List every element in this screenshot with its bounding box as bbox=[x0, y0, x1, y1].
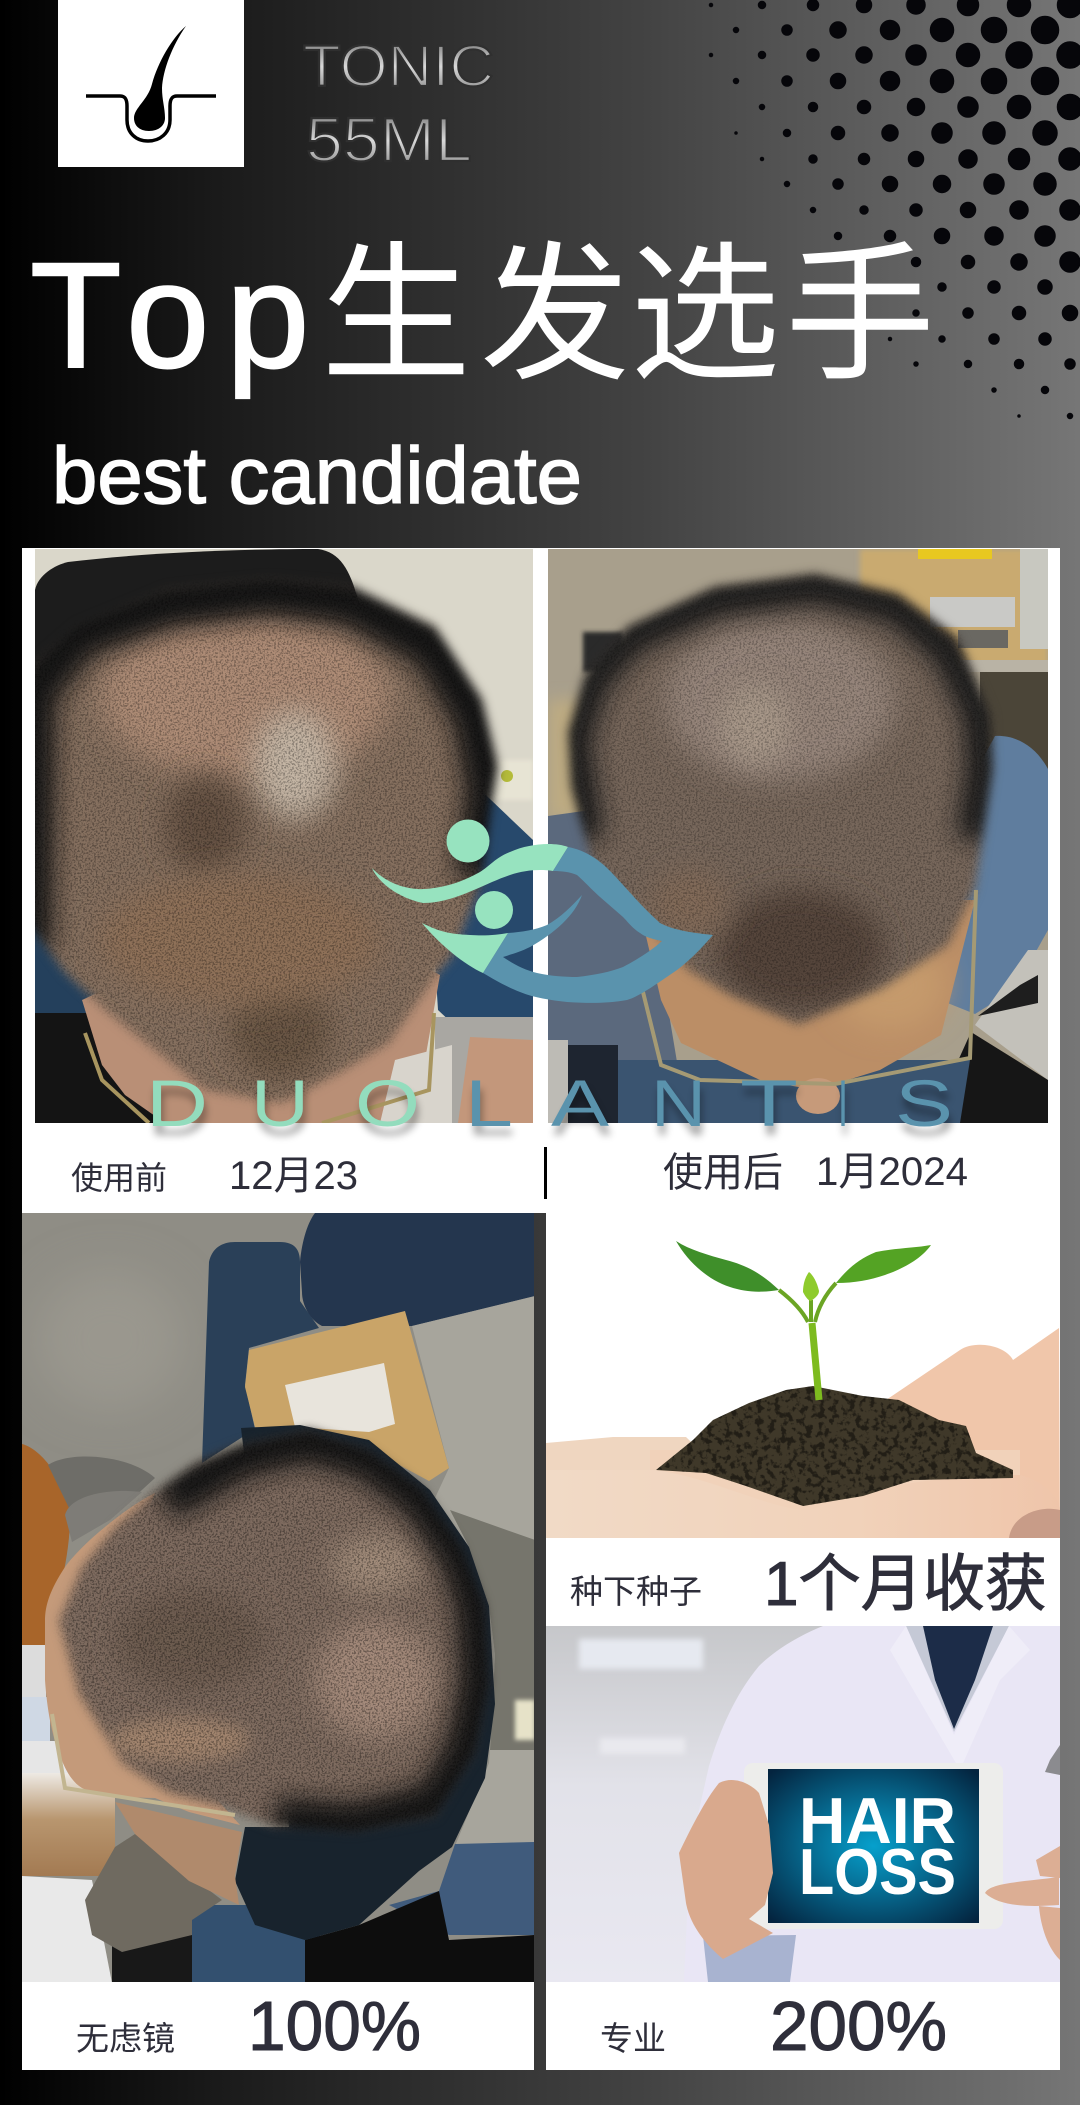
photo: before bbox=[20, 549, 533, 1123]
logo: DUOLANTIS wordmark: L bbox=[467, 1075, 515, 1149]
caption: after: 1月2024 bbox=[816, 1150, 968, 1194]
logo: DUOLANTIS wordmark: I bbox=[840, 1075, 850, 1149]
logo: DUOLANTIS wordmark: L bbox=[465, 1066, 513, 1140]
logo: DUOLANTIS wordmark: S bbox=[895, 1066, 953, 1140]
caption: before: 12月23 bbox=[229, 1154, 358, 1198]
logo box with hair follicle icon bbox=[58, 0, 244, 167]
photo: top view head bbox=[22, 1213, 535, 1983]
logo: DUOLANTIS wordmark: S bbox=[897, 1075, 955, 1149]
caption panel: professional: 专业 bbox=[600, 2020, 666, 2057]
product label TONIC 55ML: 55ML bbox=[306, 106, 472, 175]
photo: doctor with hair loss tablet: HAIR bbox=[799, 1784, 956, 1857]
caption: after bbox=[663, 1150, 968, 1195]
divider bbox=[544, 1147, 547, 1199]
caption: before bbox=[71, 1154, 358, 1198]
logo: DUOLANTIS wordmark: N bbox=[653, 1075, 708, 1149]
photo: after bbox=[548, 549, 1048, 1123]
caption panel: one month harvest: 1个月收获 bbox=[764, 1550, 1047, 1619]
logo: DUOLANTIS wordmark: T bbox=[742, 1075, 800, 1149]
photo: doctor with hair loss tablet bbox=[546, 1626, 1060, 1982]
photo: doctor with hair loss tablet: LOSS bbox=[799, 1835, 956, 1908]
logo: DUOLANTIS wordmark: N bbox=[651, 1066, 706, 1140]
title: 生发选手 bbox=[321, 231, 935, 399]
logo: DUOLANTIS wordmark: D bbox=[148, 1075, 210, 1149]
title bbox=[30, 231, 935, 399]
caption: before: 使用前 bbox=[71, 1160, 167, 1196]
logo: DUOLANTIS wordmark: U bbox=[253, 1075, 311, 1149]
logo: DUOLANTIS wordmark: U bbox=[251, 1066, 309, 1140]
caption panel: one month harvest bbox=[546, 1538, 1060, 1626]
subtitle: best candidate bbox=[52, 431, 582, 520]
caption panel: professional bbox=[546, 1982, 1060, 2070]
product label TONIC 55ML bbox=[303, 34, 494, 175]
logo: DUOLANTIS wordmark: O bbox=[355, 1066, 420, 1140]
logo: DUOLANTIS wordmark: O bbox=[357, 1075, 422, 1149]
caption panel: no filter: 无虑镜 bbox=[76, 2020, 175, 2057]
caption panel: no filter: 100% bbox=[248, 1987, 421, 2065]
caption panel: no filter bbox=[22, 1982, 534, 2070]
product label TONIC 55ML: TONIC bbox=[303, 34, 494, 99]
logo: DUOLANTIS wordmark bbox=[146, 1066, 955, 1149]
logo: DUOLANTIS wordmark: D bbox=[146, 1066, 208, 1140]
caption panel: one month harvest: 种下种子 bbox=[570, 1573, 702, 1610]
logo: DUOLANTIS mark bbox=[372, 820, 713, 1003]
logo: DUOLANTIS wordmark: I bbox=[838, 1066, 848, 1140]
panel: before/after white frame bbox=[22, 548, 1060, 1213]
logo: DUOLANTIS wordmark: A bbox=[551, 1066, 609, 1140]
photo: plant in hand bbox=[546, 1213, 1060, 1538]
logo: DUOLANTIS wordmark: T bbox=[740, 1066, 798, 1140]
caption panel: professional: 200% bbox=[770, 1987, 947, 2065]
logo: DUOLANTIS wordmark: A bbox=[553, 1075, 611, 1149]
title: Top bbox=[30, 231, 309, 399]
halftone dots pattern bbox=[710, 0, 1080, 418]
caption: after: 使用后 bbox=[663, 1151, 783, 1195]
